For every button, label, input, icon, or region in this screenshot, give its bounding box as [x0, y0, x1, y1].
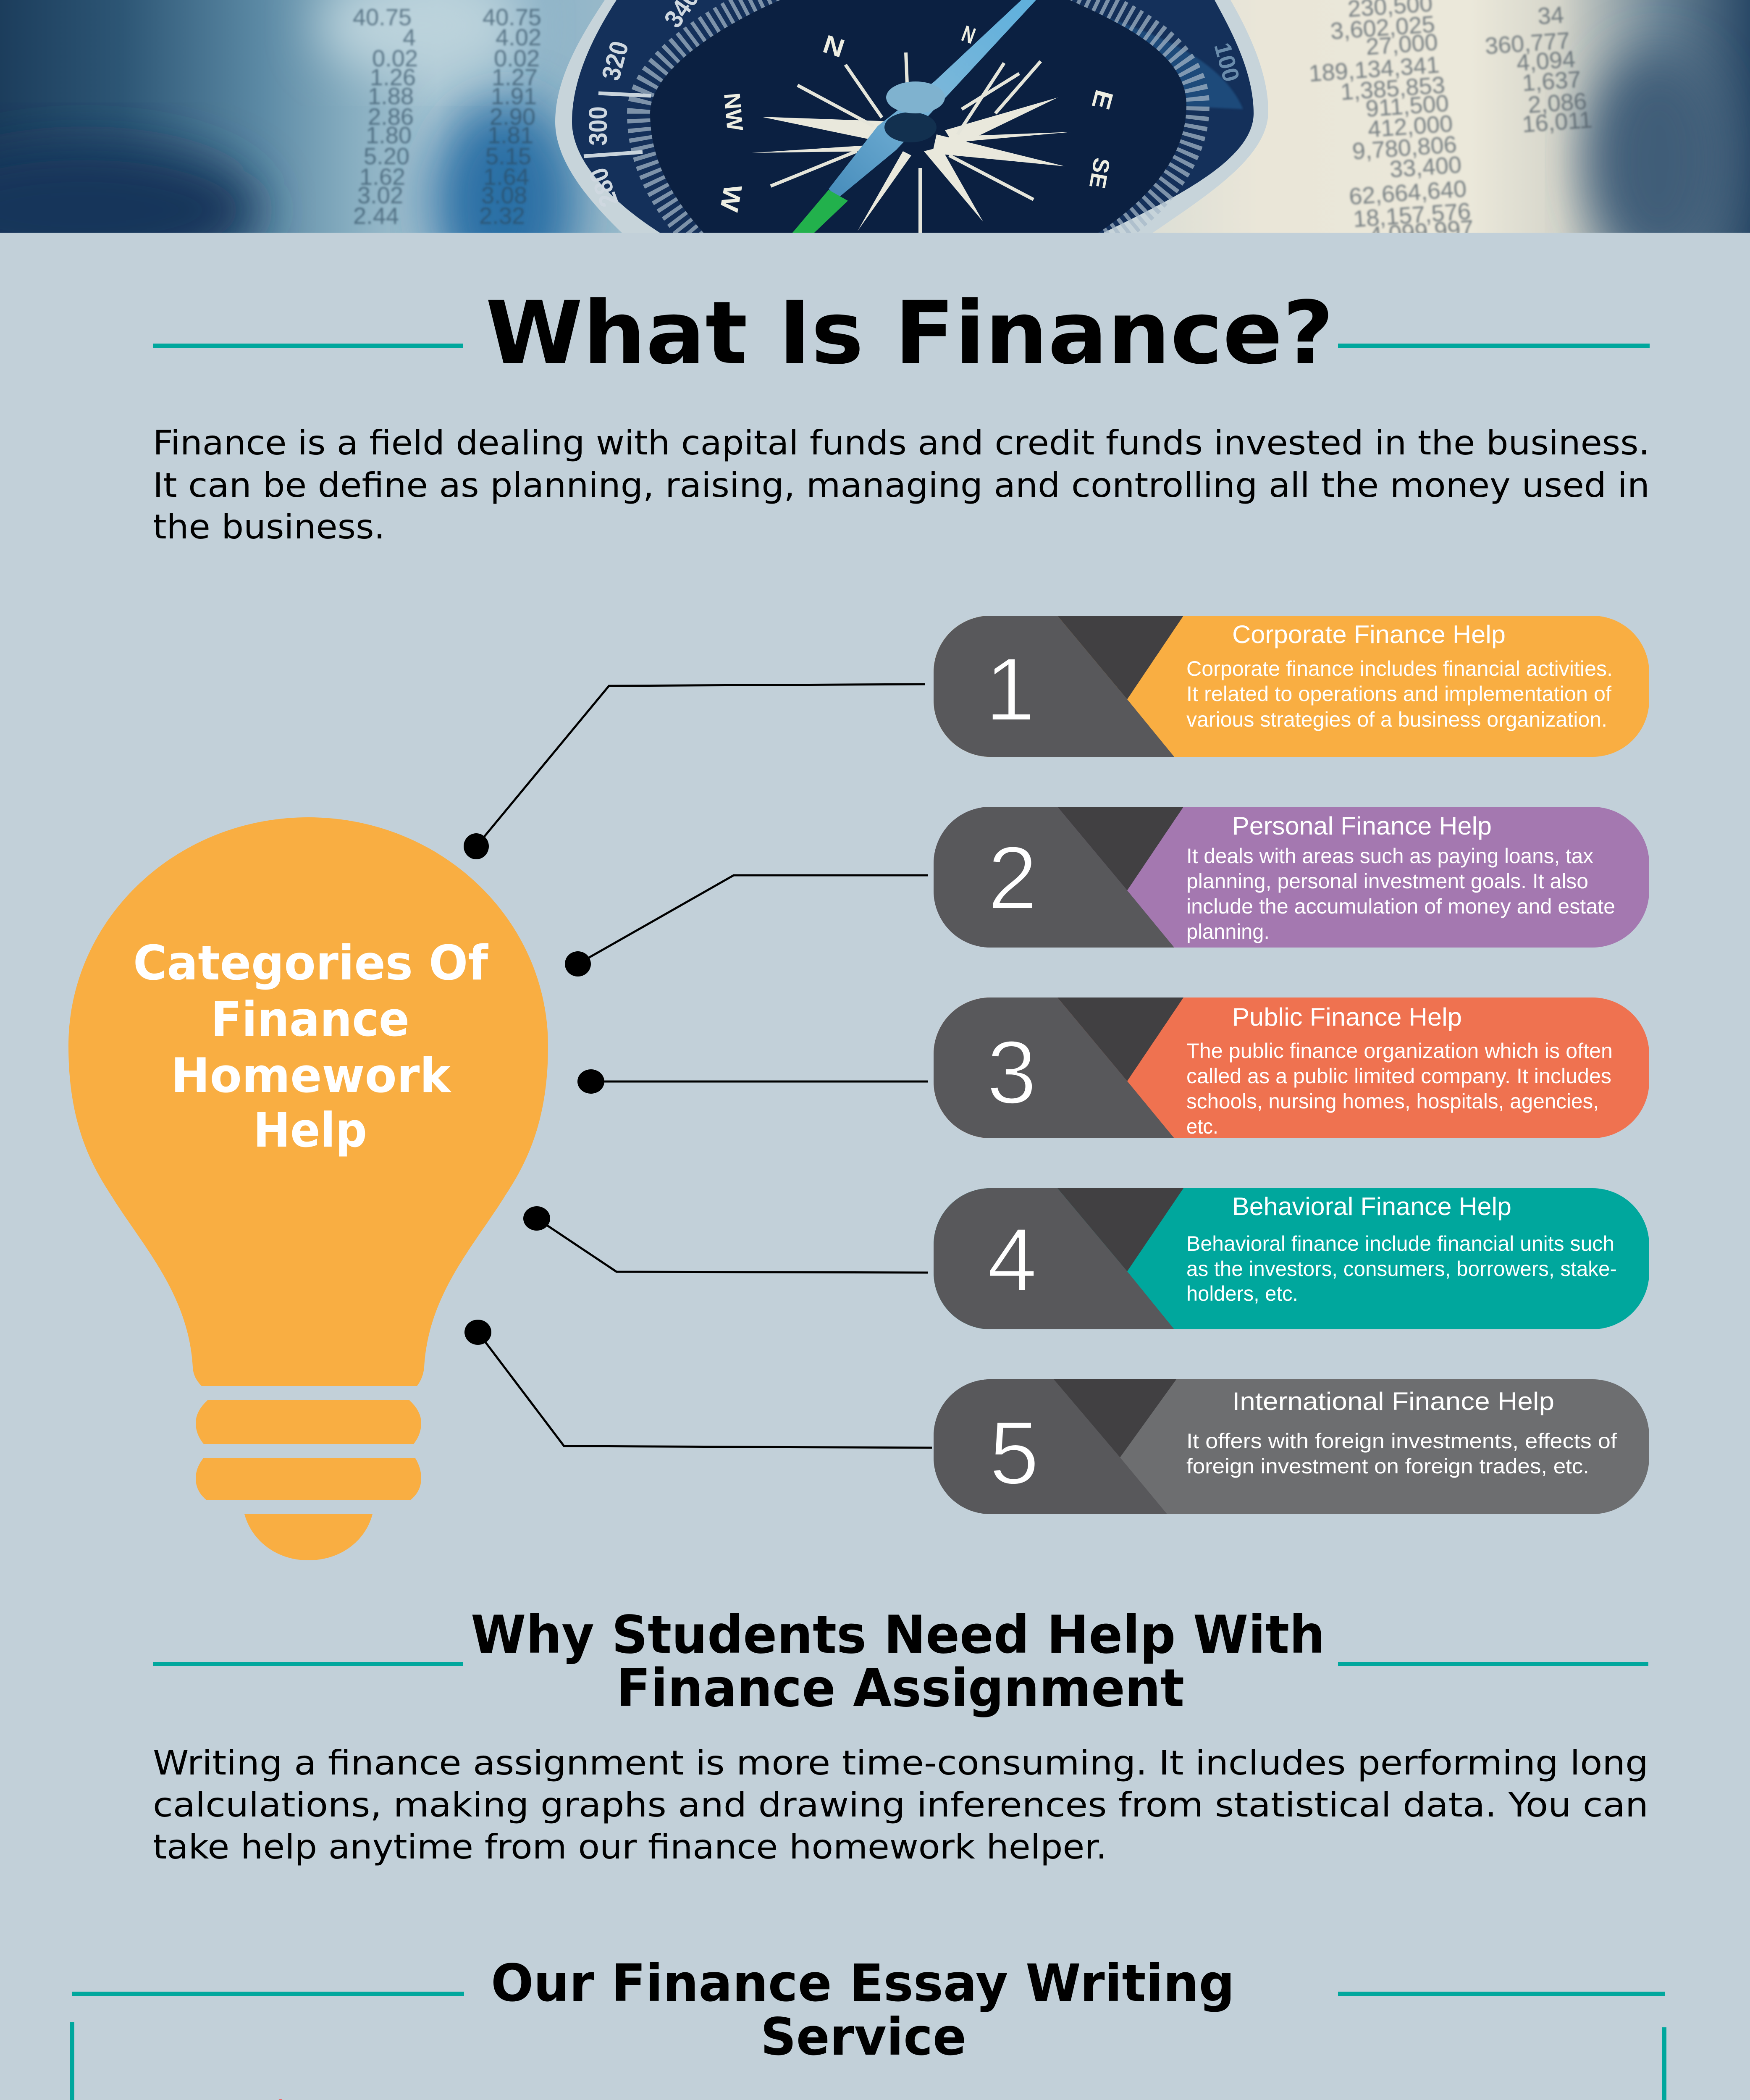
- hero photo: compass on financial figures: [0, 0, 1750, 233]
- panel: corporate finance: Corporate Finance Help: [1232, 620, 1506, 648]
- icon: light bulb with categories title: Finance: [211, 992, 409, 1047]
- text block: finance definition: the business.: [153, 507, 385, 546]
- hero photo: compass on financial figures: 2.32: [479, 202, 525, 229]
- hero photo: compass on financial figures: 62,664,640: [1348, 175, 1467, 210]
- hero photo: compass on financial figures: 911,500: [1365, 89, 1450, 122]
- hero photo: compass on financial figures: 40.75: [483, 4, 541, 30]
- dashed frame around services: [70, 2022, 1666, 2100]
- text block: why students need help: calculations, making graphs and drawing inferences from statistical data. You can: [153, 1785, 1648, 1824]
- section heading: essay writing service: [72, 1953, 1665, 2067]
- hero photo: compass on financial figures: 2.90: [490, 103, 535, 130]
- hero photo: compass on financial figures: SE: [1084, 156, 1115, 190]
- hero photo: compass on financial figures: 1.64: [483, 163, 529, 190]
- icon: light bulb with categories title: Homework: [171, 1048, 452, 1103]
- hero photo: compass on financial figures: 2.86: [368, 103, 414, 130]
- text block: why students need help: Writing a finance assignment is more time-consuming. It includes performing long: [153, 1743, 1648, 1782]
- hero photo: compass on financial figures: 16,011: [1521, 106, 1593, 137]
- hero photo: compass on financial figures: 4,094: [1516, 45, 1576, 76]
- hero photo: compass on financial figures: 1.27: [492, 64, 538, 90]
- panel: personal finance: planning.: [1186, 920, 1270, 943]
- panel: behavioral finance: as the investors, consumers, borrowers, stake-: [1186, 1257, 1617, 1281]
- hero photo: compass on financial figures: 40.75: [353, 4, 412, 30]
- section heading: why students need help: Why Students Need Help With: [471, 1605, 1325, 1665]
- connector lines with dots: [464, 684, 932, 1448]
- hero photo: compass on financial figures: 0.02: [494, 45, 540, 71]
- panel: personal finance: It deals with areas such as paying loans, tax: [1186, 844, 1593, 868]
- text block: finance definition: [153, 423, 1650, 546]
- section heading: What Is Finance: What Is Finance?: [485, 283, 1334, 383]
- hero photo: compass on financial figures: 360,777: [1484, 27, 1571, 59]
- hero photo: compass on financial figures: 1.81: [488, 122, 533, 148]
- hero photo: compass on financial figures: 4.02: [496, 24, 541, 50]
- panel: public finance: etc.: [1186, 1115, 1218, 1138]
- hero photo: compass on financial figures: 0.02: [372, 45, 418, 71]
- hero photo: compass on financial figures: 18,157,576: [1352, 197, 1472, 232]
- hero photo: compass on financial figures: 300: [584, 106, 613, 146]
- section heading: essay writing service: Our Finance Essay Writing: [491, 1953, 1235, 2013]
- panel: international finance: It offers with foreign investments, effects of: [1186, 1429, 1617, 1453]
- panel: personal finance: include the accumulation of money and estate: [1186, 895, 1615, 918]
- panel: international finance: foreign investment on foreign trades, etc.: [1186, 1454, 1589, 1478]
- panel: behavioral finance: Behavioral Finance Help: [1232, 1192, 1511, 1221]
- panel: corporate finance: 1: [985, 639, 1035, 740]
- text block: why students need help: [153, 1743, 1648, 1866]
- hero photo: compass on financial figures: 5.15: [485, 143, 531, 169]
- hero photo: compass on financial figures: 412,000: [1367, 110, 1454, 142]
- hero photo: compass on financial figures: 1.62: [359, 163, 405, 190]
- panel: public finance: [924, 998, 1649, 1138]
- panel: behavioral finance: Behavioral finance include financial units such: [1186, 1232, 1614, 1255]
- hero photo: compass on financial figures: 1,385,853: [1340, 71, 1446, 105]
- panel: personal finance: planning, personal investment goals. It also: [1186, 869, 1588, 893]
- text block: finance definition: It can be define as planning, raising, managing and controlling all the money used in: [153, 466, 1650, 505]
- hero photo: compass on financial figures: N: [958, 21, 979, 49]
- hero photo: compass on financial figures: 1.26: [370, 64, 416, 90]
- panel: behavioral finance: holders, etc.: [1186, 1282, 1298, 1305]
- panel: corporate finance: [924, 616, 1649, 757]
- panel: corporate finance: various strategies of a business organization.: [1186, 708, 1607, 731]
- section heading: why students need help: [153, 1605, 1648, 1719]
- hero photo: compass on financial figures: E: [1086, 87, 1119, 113]
- panel: corporate finance: It related to operations and implementation of: [1186, 682, 1611, 706]
- hero photo: compass on financial figures: 3.08: [481, 182, 527, 208]
- panel: international finance: 5: [989, 1403, 1039, 1503]
- hero photo: compass on financial figures: 100: [1209, 40, 1245, 84]
- panel: personal finance: 2: [987, 828, 1038, 928]
- icon: light bulb with categories title: Help: [253, 1102, 367, 1158]
- hero photo: compass on financial figures: 1.91: [491, 83, 537, 109]
- icon: light bulb with categories title: [68, 817, 548, 1560]
- hero photo: compass on financial figures: 1.88: [368, 83, 414, 109]
- hero photo: compass on financial figures: N: [820, 29, 848, 63]
- panel: public finance: schools, nursing homes, hospitals, agencies,: [1186, 1089, 1599, 1113]
- hero photo: compass on financial figures: 5.20: [364, 143, 409, 169]
- panel: behavioral finance: 4: [987, 1210, 1037, 1310]
- hero photo: compass on financial figures: 2,086: [1527, 87, 1587, 118]
- panel: public finance: called as a public limited company. It includes: [1186, 1064, 1611, 1088]
- section heading: why students need help: Finance Assignment: [617, 1658, 1184, 1719]
- hero photo: compass on financial figures: W: [714, 182, 748, 214]
- panel: public finance: The public finance organization which is often: [1186, 1039, 1613, 1063]
- section heading: essay writing service: Service: [761, 2007, 966, 2067]
- section heading: What Is Finance: [153, 283, 1650, 383]
- hero photo: compass on financial figures: 33,400: [1389, 151, 1462, 182]
- panel: public finance: Public Finance Help: [1232, 1003, 1462, 1031]
- hero photo: compass on financial figures: 4: [403, 24, 416, 50]
- panel: international finance: International Finance Help: [1232, 1387, 1554, 1415]
- hero photo: compass on financial figures: 2.44: [353, 202, 399, 229]
- hero photo: compass on financial figures: 34: [1537, 1, 1565, 29]
- hero photo: compass on financial figures: 189,134,341: [1308, 51, 1440, 87]
- hero photo: compass on financial figures: 3.02: [357, 182, 403, 208]
- hero photo: compass on financial figures: 320: [596, 38, 634, 84]
- hero photo: compass on financial figures: 9,780,806: [1351, 131, 1458, 164]
- hero photo: compass on financial figures: 1,637: [1521, 66, 1582, 96]
- panel: corporate finance: Corporate finance includes financial activities.: [1186, 657, 1613, 680]
- text block: finance definition: Finance is a field dealing with capital funds and credit funds invested in the business.: [153, 423, 1650, 462]
- panel: public finance: 3: [987, 1022, 1037, 1123]
- panel: personal finance: [924, 807, 1649, 948]
- hero photo: compass on financial figures: 1.80: [366, 122, 412, 148]
- icon: light bulb with categories title: Categories Of: [133, 935, 489, 991]
- hero photo: compass on financial figures: 280: [584, 164, 624, 211]
- hero photo: compass on financial figures: NW: [719, 92, 748, 132]
- hero photo: compass on financial figures: 27,000: [1365, 29, 1439, 60]
- panel: behavioral finance: [924, 1188, 1649, 1329]
- text block: why students need help: take help anytime from our finance homework helper.: [153, 1827, 1107, 1866]
- hero photo: compass on financial figures: 4,099,997: [1368, 215, 1475, 248]
- hero photo: compass on financial figures: 3,602,025: [1330, 10, 1436, 44]
- panel: international finance: [924, 1379, 1649, 1514]
- panel: personal finance: Personal Finance Help: [1232, 812, 1492, 840]
